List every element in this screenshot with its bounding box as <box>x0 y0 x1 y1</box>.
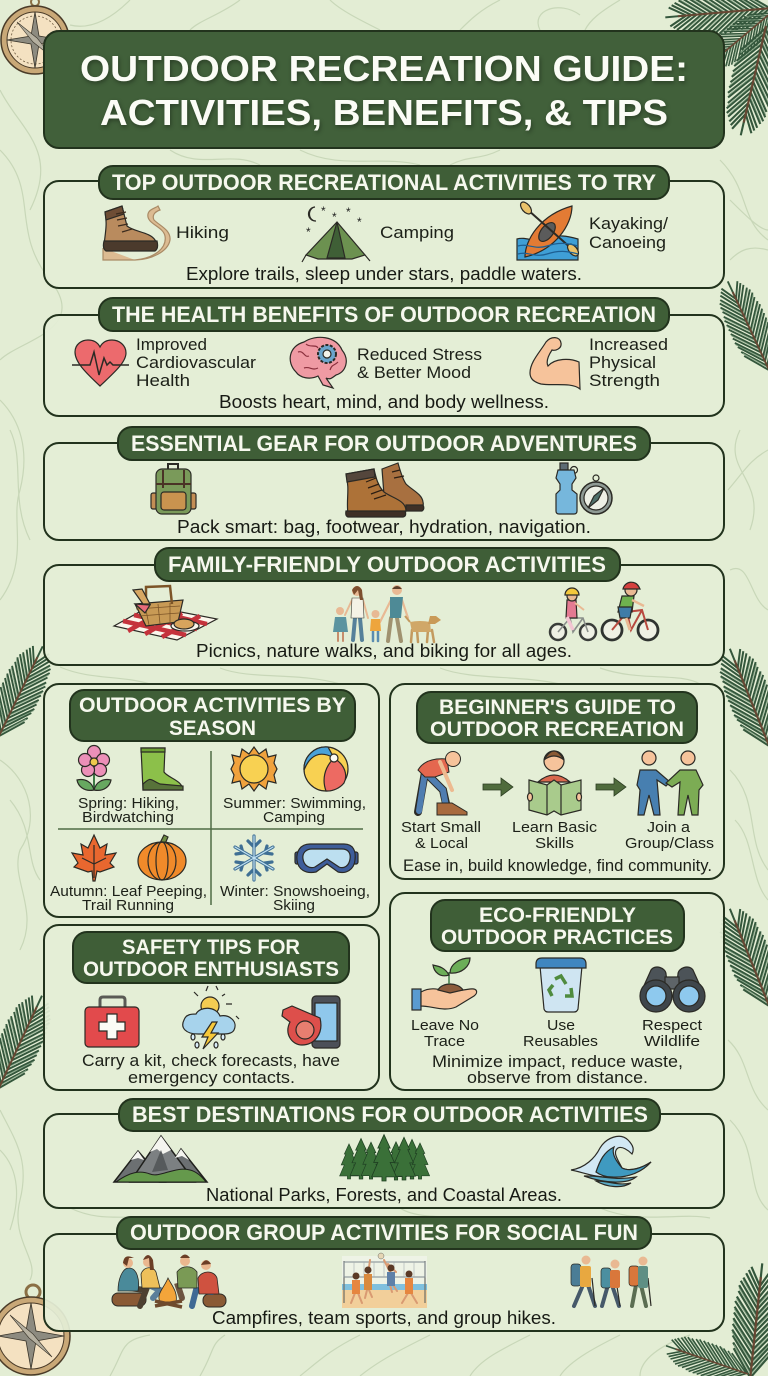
title text: OUTDOOR RECREATION GUIDE: <box>80 48 688 89</box>
label <box>401 819 481 852</box>
caption: Picnics, nature walks, and biking for all ages. <box>196 641 572 661</box>
icon: tent under stars: * <box>321 204 326 218</box>
label: Group/Class <box>625 835 714 852</box>
caption: Explore trails, sleep under stars, paddle waters. <box>186 264 582 284</box>
caption: Minimize impact, reduce waste, <box>432 1052 683 1071</box>
pine branch: bottom right <box>660 1261 768 1376</box>
heading: THE HEALTH BENEFITS OF OUTDOOR RECREATION <box>112 302 656 327</box>
icon: heart with pulse <box>72 340 129 386</box>
pine branch: left middle <box>0 638 61 747</box>
panel: by season <box>44 684 379 917</box>
panel: beginner's guide <box>390 684 724 879</box>
compass: top left <box>1 0 69 74</box>
label: Join a <box>647 819 691 836</box>
label: Use <box>547 1017 575 1034</box>
caption: Ease in, build knowledge, find community. <box>403 856 712 875</box>
heading: OUTDOOR RECREATION <box>430 718 684 741</box>
icon: forest <box>340 1135 430 1181</box>
heading: OUTDOOR ENTHUSIASTS <box>83 958 339 981</box>
icon: group hikers <box>571 1256 651 1306</box>
icon: rain boot <box>141 748 183 790</box>
label <box>357 345 482 382</box>
icon: beach volleyball <box>342 1253 427 1308</box>
icon: tent under stars <box>302 204 370 262</box>
label: Kayaking/ <box>589 214 668 233</box>
icon: pumpkin <box>138 835 186 880</box>
icon: spring flower <box>77 746 111 790</box>
caption <box>432 1052 683 1087</box>
label <box>78 795 179 826</box>
icon: tent under stars: * <box>332 210 337 224</box>
heading: SAFETY TIPS FOR <box>122 936 300 959</box>
label: Reusables <box>523 1033 598 1050</box>
icon: tent under stars: * <box>306 225 311 239</box>
icon: kayak <box>517 200 581 260</box>
icon: sun <box>231 747 277 791</box>
caption: Carry a kit, check forecasts, have <box>82 1051 340 1070</box>
icon: person with map <box>528 751 582 815</box>
label <box>220 883 370 914</box>
icon: storm weather <box>183 986 239 1049</box>
caption <box>82 1051 340 1087</box>
icon: beach ball <box>304 747 348 791</box>
label <box>223 795 366 826</box>
pine branch: right middle <box>710 641 768 756</box>
label <box>136 335 256 390</box>
heading: OUTDOOR GROUP ACTIVITIES FOR SOCIAL FUN <box>130 1220 638 1245</box>
label: Camping <box>263 809 325 826</box>
label: Start Small <box>401 819 481 836</box>
icon: reusable container <box>536 958 586 1012</box>
compass: bottom left <box>0 1285 70 1375</box>
heading <box>73 932 349 983</box>
label: Autumn: Leaf Peeping, <box>50 883 207 900</box>
label: Hiking <box>176 223 229 242</box>
label: Skiing <box>273 897 315 914</box>
icon: hiking boot <box>103 206 170 260</box>
caption: Campfires, team sports, and group hikes. <box>212 1308 556 1328</box>
label: Respect <box>642 1017 703 1034</box>
heading: ESSENTIAL GEAR FOR OUTDOOR ADVENTURES <box>131 431 637 456</box>
label <box>589 335 668 390</box>
panel: family friendly <box>44 548 724 665</box>
heading: BEST DESTINATIONS FOR OUTDOOR ACTIVITIES <box>132 1102 648 1127</box>
panel: essential gear <box>44 427 724 540</box>
icon: flexed arm <box>530 338 580 389</box>
panel: top activities <box>44 166 724 288</box>
label: Canoeing <box>589 233 666 252</box>
icon: hiking boots <box>346 463 424 517</box>
heading: BEGINNER'S GUIDE TO <box>439 696 676 719</box>
label: Wildlife <box>644 1033 700 1050</box>
icon: tent under stars: * <box>357 215 362 229</box>
caption: Boosts heart, mind, and body wellness. <box>219 392 549 412</box>
label: Trace <box>424 1033 465 1050</box>
label: Skills <box>535 835 574 852</box>
label: Cardiovascular <box>136 353 256 372</box>
icon: first aid kit <box>85 997 139 1047</box>
label: & Better Mood <box>357 363 471 382</box>
label <box>625 819 714 852</box>
label: Physical <box>589 353 656 372</box>
label: Winter: Snowshoeing, <box>220 883 370 900</box>
pine branch: right upper <box>710 273 768 380</box>
panel: health benefits <box>44 298 724 416</box>
icon: person tying boot <box>418 752 467 815</box>
heading: FAMILY-FRIENDLY OUTDOOR ACTIVITIES <box>168 552 606 577</box>
icon: children on bikes <box>550 582 658 640</box>
icon: campfire group <box>112 1254 226 1307</box>
label: Leave No <box>411 1017 479 1034</box>
heading: OUTDOOR PRACTICES <box>441 926 673 949</box>
label: Camping <box>380 223 454 242</box>
label: Strength <box>589 371 660 390</box>
label <box>411 1017 479 1050</box>
panel: safety tips <box>44 925 379 1090</box>
label: Increased <box>589 335 668 354</box>
label <box>589 214 668 252</box>
heading: SEASON <box>169 717 256 740</box>
caption: National Parks, Forests, and Coastal Areas. <box>206 1185 562 1205</box>
icon: autumn leaf <box>72 835 116 881</box>
icon: backpack <box>151 464 196 514</box>
icon: tent under stars: * <box>346 205 351 219</box>
caption: Pack smart: bag, footwear, hydration, navigation. <box>177 517 591 537</box>
pine branch: left lower <box>0 987 60 1099</box>
icon: water bottle <box>556 463 578 514</box>
icon: ocean wave <box>571 1136 651 1187</box>
title text: ACTIVITIES, BENEFITS, & TIPS <box>100 92 668 133</box>
caption: emergency contacts. <box>128 1068 295 1087</box>
icon: family walking <box>333 585 441 642</box>
label: Improved <box>136 335 207 354</box>
label: Reduced Stress <box>357 345 482 364</box>
season dividers <box>58 751 363 905</box>
icon: mountains <box>114 1136 207 1182</box>
icon: binoculars <box>640 967 705 1012</box>
heading <box>70 690 355 741</box>
pine branch: right lower <box>710 901 768 1016</box>
label <box>50 883 207 914</box>
label: Trail Running <box>82 897 174 914</box>
arrow <box>483 778 513 796</box>
label: & Local <box>415 835 468 852</box>
icon: handshake people <box>637 751 703 815</box>
arrow <box>596 778 626 796</box>
icon: whistle and phone <box>282 996 340 1048</box>
icon: ski goggles <box>295 844 358 872</box>
label: Spring: Hiking, <box>78 795 179 812</box>
icon: hand holding seedling <box>412 958 477 1010</box>
heading: TOP OUTDOOR RECREATIONAL ACTIVITIES TO TRY <box>112 170 656 195</box>
label <box>523 1017 598 1050</box>
icon: brain with gear <box>290 337 346 388</box>
label: Summer: Swimming, <box>223 795 366 812</box>
panel: best destinations <box>44 1099 724 1208</box>
icon: picnic basket and blanket <box>114 586 217 640</box>
heading <box>417 692 697 743</box>
label <box>642 1017 703 1050</box>
label: Birdwatching <box>82 809 174 826</box>
heading: ECO-FRIENDLY <box>479 904 636 927</box>
label <box>512 819 598 852</box>
heading <box>431 900 684 951</box>
caption: observe from distance. <box>467 1068 648 1087</box>
label: Health <box>136 371 190 390</box>
title text <box>80 48 688 133</box>
label: Learn Basic <box>512 819 598 836</box>
heading: OUTDOOR ACTIVITIES BY <box>79 694 346 717</box>
icon: snowflake <box>235 836 273 880</box>
pine branch: top right <box>663 0 768 140</box>
panel: group activities <box>44 1217 724 1331</box>
panel: eco-friendly <box>390 893 724 1090</box>
icon: navigation compass <box>580 475 612 514</box>
title banner <box>44 31 724 148</box>
